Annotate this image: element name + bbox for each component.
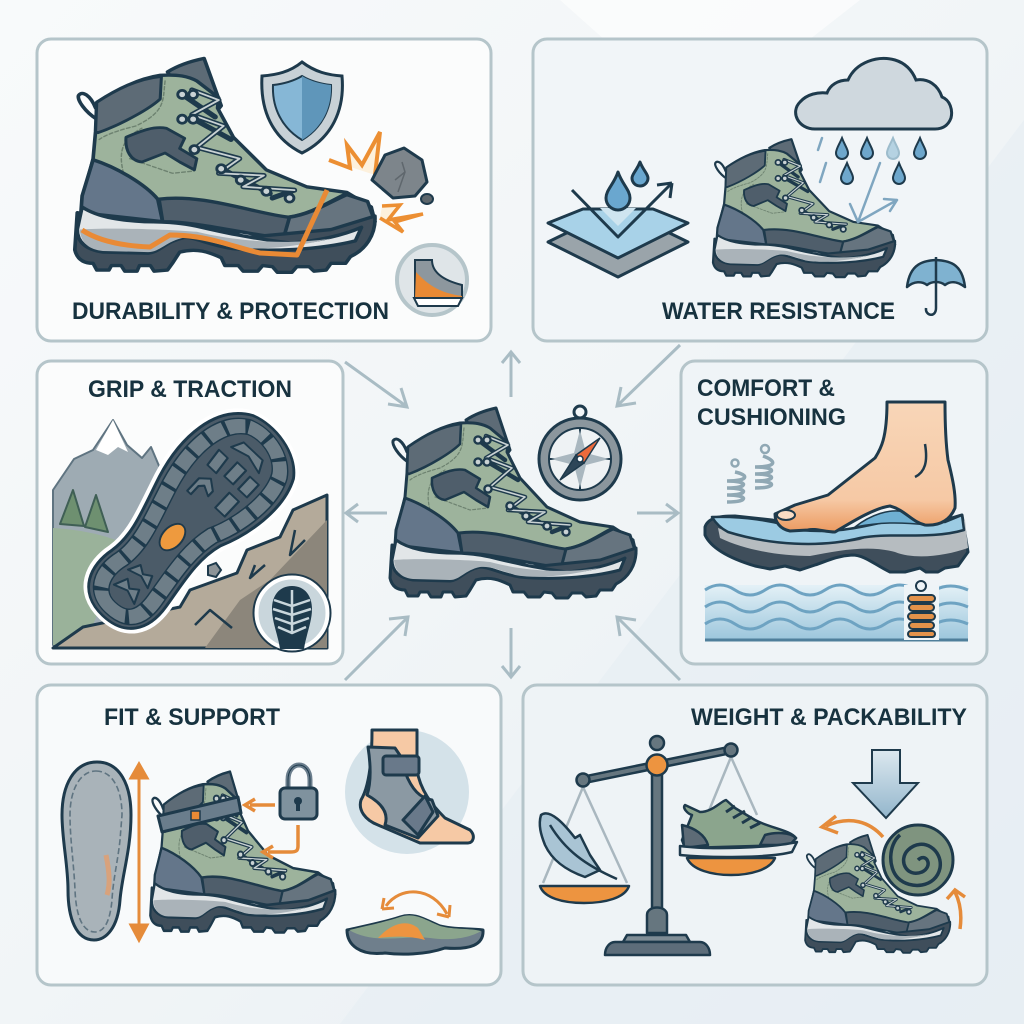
rocky slope xyxy=(53,495,327,648)
impact spark xyxy=(380,205,423,232)
arrow: left xyxy=(346,504,387,522)
title: comfort: CUSHIONING xyxy=(697,404,846,431)
foot xyxy=(775,402,955,532)
boot: durability xyxy=(75,58,375,272)
rain drops xyxy=(836,138,926,184)
panel: weight and packability xyxy=(523,685,987,985)
boot: water xyxy=(713,139,895,277)
insole xyxy=(62,762,131,940)
arrow: weight to centre xyxy=(617,617,680,680)
title: comfort: COMFORT & xyxy=(697,375,835,402)
orange arrows xyxy=(245,799,298,858)
title: water: WATER RESISTANCE xyxy=(662,298,895,325)
arrow: water to centre xyxy=(617,345,680,406)
orange protective stripe xyxy=(82,190,327,255)
boot: packable xyxy=(805,835,950,953)
ankle brace illustration xyxy=(345,730,473,854)
orange curved arrows xyxy=(822,816,965,929)
arrow: right xyxy=(637,504,678,522)
badge: mini boot xyxy=(397,245,467,315)
boot: fit xyxy=(150,772,335,933)
icon: waterproof membrane xyxy=(548,162,688,277)
badge: tread print xyxy=(254,574,330,652)
icon: shield xyxy=(262,62,342,153)
cushion waves xyxy=(705,585,968,640)
panel: comfort and cushioning xyxy=(681,361,987,664)
central boot xyxy=(390,408,636,598)
icon: springs xyxy=(727,445,773,502)
icon: cloud xyxy=(796,58,952,129)
panel: fit and support xyxy=(37,685,501,985)
icon: pebble xyxy=(421,194,433,204)
icon: rolled spiral xyxy=(883,825,953,895)
icon: umbrella xyxy=(907,257,965,315)
down arrow xyxy=(853,750,918,818)
ankle strap xyxy=(158,797,241,832)
small shoe on scale xyxy=(680,800,797,857)
balance scale xyxy=(540,736,775,955)
boot sole tread xyxy=(59,390,314,652)
icon: impact burst xyxy=(329,132,380,175)
icon: padlock xyxy=(280,765,317,819)
title: comfort xyxy=(697,375,846,431)
rock pebble xyxy=(208,563,221,577)
length arrow xyxy=(131,764,147,940)
icon: feather xyxy=(540,813,617,879)
title: durability: DURABILITY & PROTECTION xyxy=(72,298,389,325)
icon: orange spring xyxy=(904,581,939,640)
cushioned sole xyxy=(705,511,968,572)
panel: grip and traction xyxy=(37,361,343,664)
icon: rock xyxy=(372,148,427,198)
title: grip: GRIP & TRACTION xyxy=(88,376,292,403)
rain streaks and deflection arrows xyxy=(818,138,897,222)
title: fit: FIT & SUPPORT xyxy=(104,704,280,731)
arrow: fit to centre xyxy=(345,617,408,680)
arrow: down xyxy=(502,628,520,677)
arrow: up xyxy=(502,352,520,397)
arch support insole xyxy=(347,892,483,954)
arrow: durability to centre xyxy=(345,362,407,407)
panel: water resistance xyxy=(533,39,987,341)
mountains xyxy=(53,420,165,645)
panel: durability and protection xyxy=(37,39,491,341)
title: weight: WEIGHT & PACKABILITY xyxy=(691,704,967,731)
icon: compass xyxy=(539,406,621,500)
